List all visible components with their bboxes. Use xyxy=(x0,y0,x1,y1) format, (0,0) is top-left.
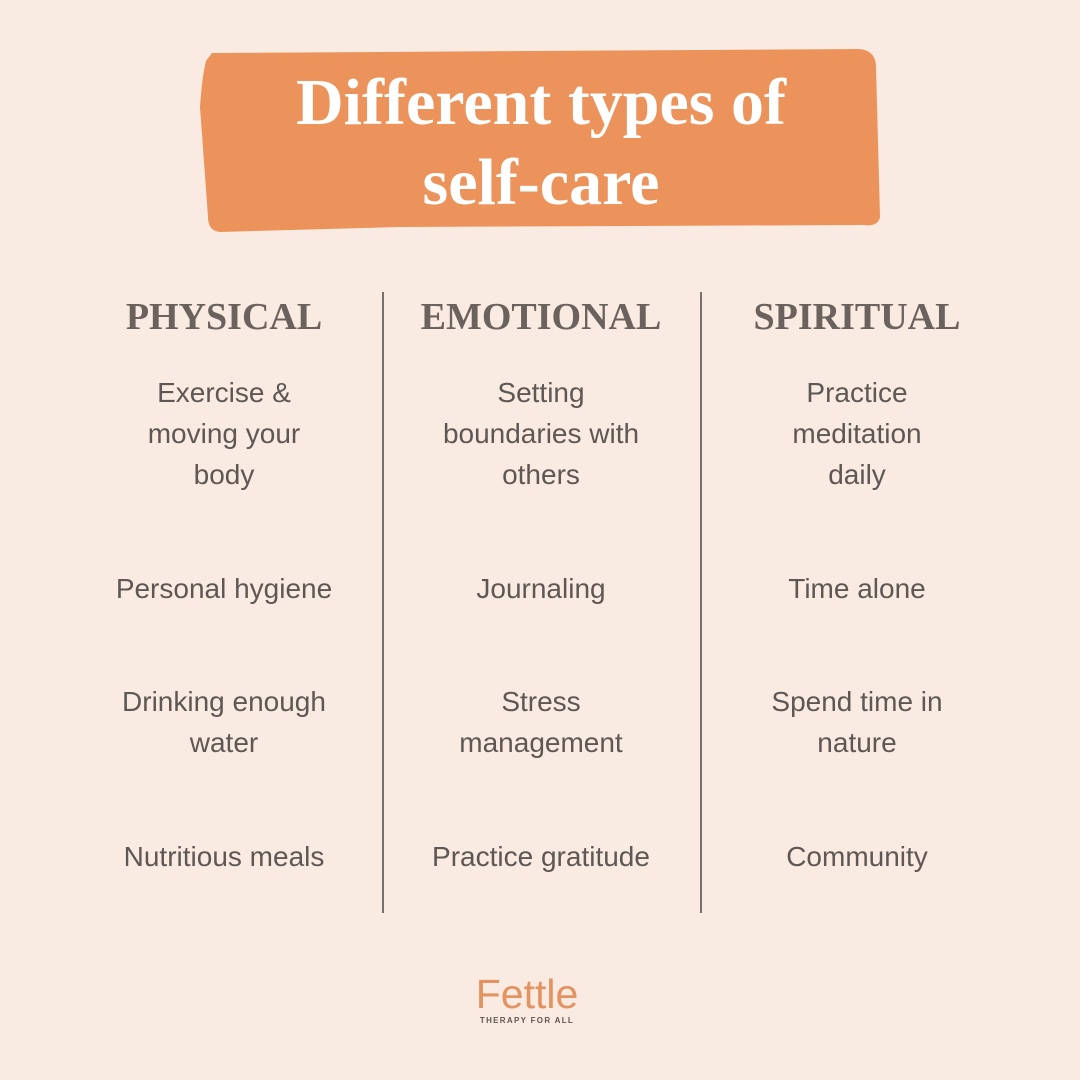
item xyxy=(122,686,326,758)
item: others xyxy=(502,459,580,490)
item: meditation xyxy=(792,418,922,449)
item xyxy=(148,377,300,490)
header: physical: PHYSICAL xyxy=(126,296,322,338)
item: Spend time in xyxy=(771,686,943,717)
item: Nutritious meals xyxy=(124,841,324,872)
column: spiritual items xyxy=(771,377,943,872)
item: Drinking enough xyxy=(122,686,326,717)
title banner: self-care xyxy=(423,146,659,219)
item: moving your xyxy=(148,418,300,449)
item: Exercise & xyxy=(157,377,291,408)
column: physical items xyxy=(116,377,332,872)
item: Time alone xyxy=(788,573,926,604)
item: Practice gratitude xyxy=(432,841,650,872)
title banner: Different types of xyxy=(296,66,786,139)
item xyxy=(459,686,623,758)
item: Setting xyxy=(497,377,585,408)
item: nature xyxy=(817,727,897,758)
item: Practice xyxy=(806,377,908,408)
logo: Fettle xyxy=(476,971,578,1017)
item: water xyxy=(190,727,258,758)
column: emotional items xyxy=(432,377,650,872)
item: boundaries with xyxy=(443,418,639,449)
item: daily xyxy=(828,459,886,490)
header: emotional: EMOTIONAL xyxy=(421,296,661,338)
title banner xyxy=(200,49,880,232)
item: management xyxy=(459,727,623,758)
item: body xyxy=(194,459,254,490)
item: Journaling xyxy=(476,573,606,604)
item: Community xyxy=(786,841,928,872)
item: Stress xyxy=(501,686,581,717)
item xyxy=(443,377,639,490)
logo: THERAPY FOR ALL xyxy=(480,1016,574,1025)
item xyxy=(771,686,943,758)
header: spiritual: SPIRITUAL xyxy=(754,296,960,338)
item: Personal hygiene xyxy=(116,573,332,604)
item xyxy=(792,377,922,490)
